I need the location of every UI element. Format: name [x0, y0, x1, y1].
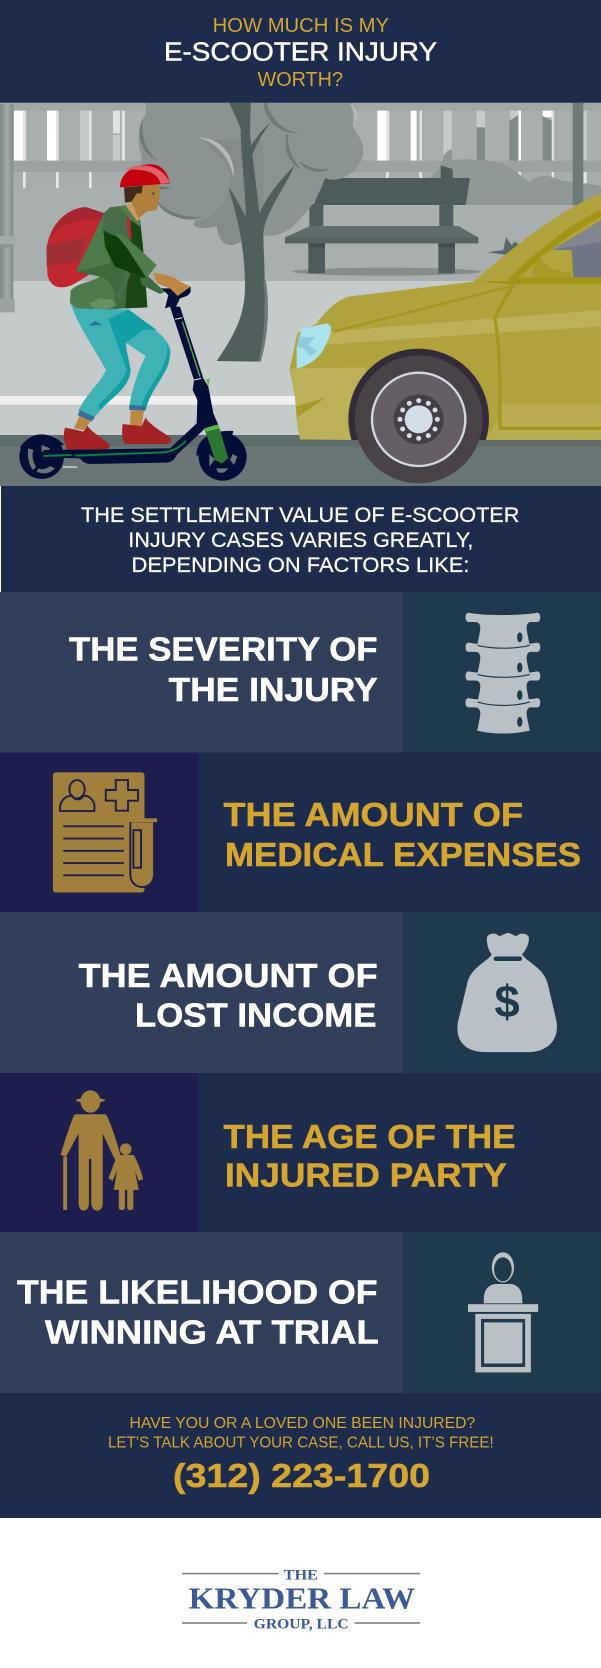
factor row: lost income: [0, 912, 601, 1073]
logo: [182, 1567, 420, 1633]
intro text: INJURY CASES VARIES GREATLY,: [128, 529, 473, 552]
lamp post: [0, 104, 16, 312]
rider: [47, 164, 191, 449]
heading: THE LIKELIHOOD OF: [17, 1273, 378, 1310]
factor row: severity of injury: [0, 592, 601, 752]
call to action text: [108, 1415, 494, 1452]
icon: person at podium: [468, 1252, 538, 1372]
intro panel: [0, 486, 601, 592]
car: [289, 193, 601, 489]
logo: KRYDER LAW: [189, 1580, 415, 1616]
heading: THE AMOUNT OF: [224, 796, 523, 833]
heading: [224, 1118, 516, 1194]
logo: GROUP, LLC: [254, 1617, 349, 1633]
call to action panel: [0, 1393, 601, 1518]
heading: INJURED PARTY: [225, 1157, 507, 1194]
heading: [17, 1273, 379, 1351]
intro text: [81, 504, 519, 577]
tree: [139, 103, 363, 362]
heading: [224, 796, 581, 873]
header panel: [0, 0, 601, 103]
icon: spine: [466, 613, 540, 734]
heading: THE AGE OF THE: [224, 1118, 516, 1155]
title line 1: HOW MUCH IS MY: [213, 15, 389, 37]
factor row: medical expenses: [0, 752, 601, 912]
heading: WINNING AT TRIAL: [45, 1314, 379, 1351]
heading: THE AMOUNT OF: [79, 957, 378, 994]
heading: THE SEVERITY OF: [69, 631, 378, 668]
heading: LOST INCOME: [135, 996, 376, 1034]
intro text: DEPENDING ON FACTORS LIKE:: [132, 554, 470, 577]
call to action text: HAVE YOU OR A LOVED ONE BEEN INJURED?: [130, 1415, 475, 1432]
intro text: THE SETTLEMENT VALUE OF E-SCOOTER: [81, 504, 519, 527]
call to action text: LET’S TALK ABOUT YOUR CASE, CALL US, IT’S FREE!: [108, 1435, 494, 1452]
title line 2: E-SCOOTER INJURY: [164, 37, 437, 67]
title line 3: WORTH?: [258, 69, 343, 91]
icon: elderly person and child: [61, 1090, 143, 1211]
icon: money bag: [457, 933, 557, 1052]
heading: [69, 631, 378, 708]
heading: THE INJURY: [169, 671, 378, 708]
heading: [79, 957, 378, 1034]
illustration: scooter rider and car on street: [0, 102, 601, 489]
factor row: age of injured party: [0, 1073, 601, 1232]
logo: THE: [284, 1567, 318, 1583]
heading: MEDICAL EXPENSES: [225, 836, 581, 873]
bench: [285, 165, 518, 276]
phone number: (312) 223-1700: [173, 1457, 430, 1494]
icon: medical record with test tube: [53, 772, 157, 893]
factor row: likelihood of winning: [0, 1232, 601, 1393]
icon: money bag: $: [495, 976, 520, 1027]
scooter: [19, 288, 247, 481]
